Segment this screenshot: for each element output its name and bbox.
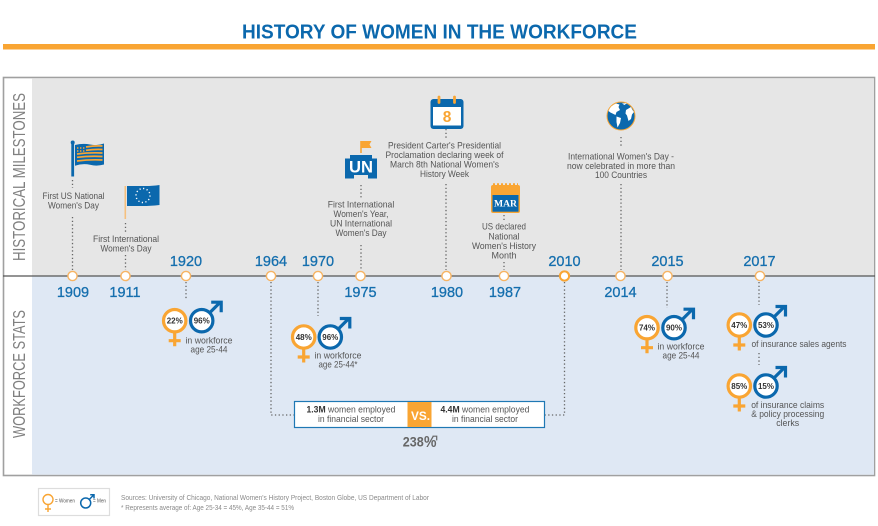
heading: historical milestones: HISTORICAL MILESTONES	[9, 93, 29, 261]
stat: 1920: 96%	[194, 316, 210, 326]
sources footnote: Sources: University of Chicago, National Women's History Project, Boston Globe, US Department of Labor	[121, 493, 429, 502]
stat: 2015: in workforce	[658, 342, 704, 352]
stat: 1920: in workforce	[186, 336, 232, 346]
icon: calendar 8	[430, 97, 464, 129]
text: president carter's proclamation: March 8th National Women's	[390, 160, 499, 170]
legend: = Women	[55, 498, 75, 504]
stat: 2017 insurance claims clerks: 15%	[758, 382, 774, 391]
text: US declared women's history month: Women's History	[472, 241, 536, 252]
text: first international women's day: First International	[93, 234, 159, 245]
icon: UN building	[345, 141, 377, 178]
stat: 2017 insurance claims clerks: 85%	[731, 382, 747, 391]
text: international women's day 100 countries	[567, 151, 675, 181]
stat: 2017 insurance claims clerks: & policy processing	[751, 409, 824, 420]
year labels	[57, 254, 776, 301]
year labels: 1987	[489, 285, 521, 301]
sources footnote: * Represents average of: Age 25-34 = 45%, Age 35-44 = 51%	[121, 503, 294, 512]
text: first US national women's day: Women's Day	[48, 201, 99, 212]
year labels: 1970	[302, 254, 334, 270]
text: US declared women's history month: US declared	[482, 222, 526, 233]
stat: 238% increase	[403, 434, 437, 451]
year labels: 1964	[255, 254, 287, 270]
stat: 2015: age 25-44	[662, 350, 700, 362]
icon: US flag	[71, 140, 104, 176]
stat: 2017 insurance claims clerks: clerks	[776, 418, 799, 429]
stat: 2017 insurance sales agents: 47%	[731, 321, 747, 330]
year labels: 2017	[743, 254, 776, 270]
year labels: 2014	[604, 285, 637, 301]
stat: 238% increase: %	[424, 434, 437, 451]
stat: 1970: 48%	[296, 333, 312, 342]
text: first international women's year: Women's Year,	[334, 209, 388, 220]
stat: 2017 insurance claims clerks: of insurance claims	[751, 400, 824, 411]
comparison box: financial sector: in financial sector	[318, 414, 384, 425]
stat: 2017 insurance sales agents	[728, 306, 847, 350]
timeline nodes	[68, 271, 765, 281]
stat: 1970: age 25-44*	[318, 360, 358, 370]
stat: 1920: age 25-44	[190, 344, 228, 356]
stat: 2015: 74%	[639, 324, 655, 333]
text: first international women's year: Women's Day	[336, 228, 387, 239]
year labels: 1980	[431, 285, 463, 301]
stat: 1970: 96%	[322, 333, 338, 342]
stat: 238% increase: 238	[403, 434, 424, 450]
year labels: 2015	[651, 254, 684, 270]
stat: 1920	[164, 302, 232, 356]
year labels: 2010	[548, 254, 581, 270]
legend	[38, 488, 110, 516]
stat: 2015	[636, 309, 704, 362]
comparison box: financial sector: in financial sector	[452, 414, 518, 425]
stat: 1920: 22%	[167, 316, 183, 326]
icon: UN building: UN	[349, 158, 373, 176]
legend: = Men	[93, 498, 106, 504]
comparison box: financial sector: 4.4M women employed	[440, 404, 530, 416]
text: first international women's year: First International	[328, 199, 394, 210]
year labels: 1911	[109, 285, 141, 301]
timeline axis	[3, 275, 875, 277]
text: first international women's year	[328, 199, 394, 239]
title: HISTORY OF WOMEN IN THE WORKFORCE	[242, 20, 637, 44]
text: president carter's proclamation: History Week	[420, 169, 469, 180]
text: president carter's proclamation: Proclamation declaring week of	[386, 150, 504, 161]
text: first international women's year: UN International	[330, 219, 392, 230]
comparison box: financial sector: VS.	[411, 409, 430, 423]
icon: March calendar	[491, 184, 520, 213]
text: US declared women's history month: National	[488, 232, 520, 242]
icon: international flag	[124, 185, 160, 219]
orange title rule	[3, 44, 875, 50]
icon: calendar 8: 8	[443, 109, 452, 126]
text: first international women's day: Women's Day	[100, 244, 152, 255]
stat: 1970: in workforce	[314, 350, 362, 362]
sources footnote	[121, 493, 429, 512]
icon: globe	[607, 102, 635, 130]
stat: 2017 insurance sales agents: of insurance sales agents	[752, 339, 847, 350]
text: first US national women's day	[42, 191, 104, 212]
text: international women's day 100 countries: 100 Countries	[595, 170, 647, 181]
text: US declared women's history month	[472, 222, 536, 262]
text: president carter's proclamation	[386, 140, 504, 180]
year labels: 1920	[170, 254, 202, 270]
year labels: 1909	[57, 285, 89, 301]
stat: 1970	[292, 318, 362, 370]
stat: 2015: 90%	[666, 324, 682, 333]
panel: timeline frame	[4, 78, 874, 476]
comparison box: financial sector: 1.3M women employed	[306, 404, 396, 416]
year labels: 1975	[344, 285, 377, 301]
comparison box: financial sector	[294, 402, 544, 428]
stat: 2017 insurance claims clerks	[728, 368, 824, 429]
text: international women's day 100 countries: now celebrated in more than	[567, 161, 675, 172]
stat: 2017 insurance sales agents: 53%	[758, 321, 774, 330]
icon: March calendar: MAR	[494, 199, 517, 209]
text: US declared women's history month: Month	[492, 250, 516, 262]
text: first international women's day	[93, 234, 159, 255]
heading: workforce stats: WORKFORCE STATS	[9, 310, 29, 438]
text: president carter's proclamation: President Carter's Presidential	[388, 140, 501, 151]
text: first US national women's day: First US National	[42, 191, 104, 202]
text: international women's day 100 countries: International Women's Day -	[568, 151, 674, 162]
